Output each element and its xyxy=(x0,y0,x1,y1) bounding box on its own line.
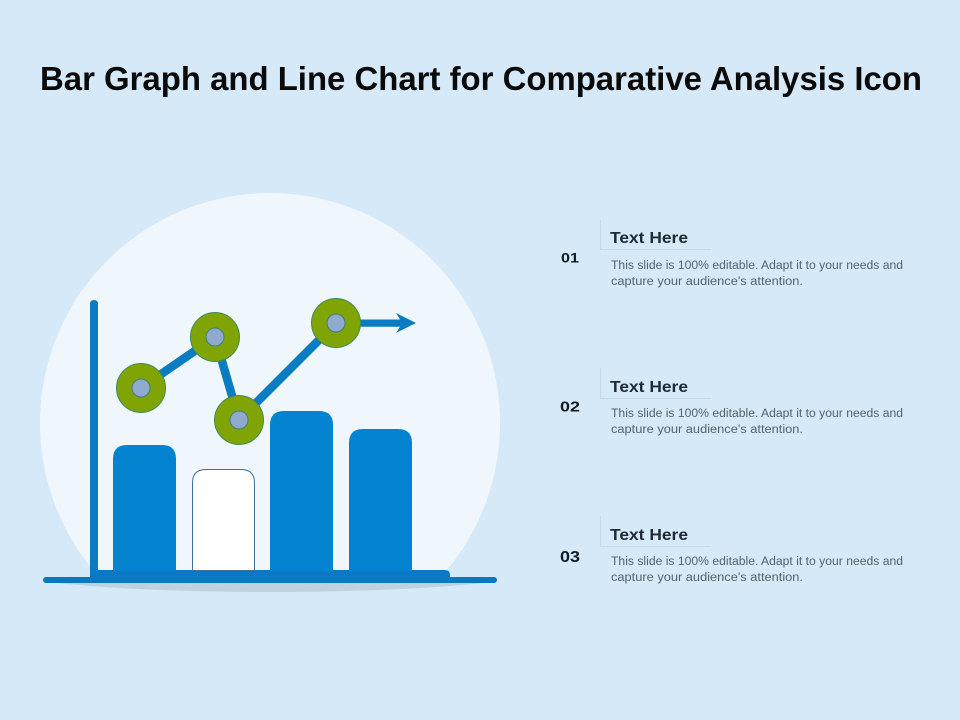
description 01: This slide is 100% editable. Adapt it to your needs and xyxy=(611,260,903,272)
platform shadow xyxy=(47,582,493,592)
background circle xyxy=(40,193,500,578)
title: Bar Graph and Line Chart for Comparative Analysis Icon xyxy=(40,60,922,97)
node 2 xyxy=(190,312,240,362)
node 4 xyxy=(312,298,360,348)
platform xyxy=(43,577,497,583)
base bar xyxy=(90,570,450,583)
item 01 xyxy=(561,220,903,288)
heading 02: Text Here xyxy=(610,379,688,396)
heading 03: Text Here xyxy=(610,527,688,544)
trend line xyxy=(141,323,336,420)
heading 01: Text Here xyxy=(610,230,688,247)
node 1 xyxy=(116,364,166,412)
number 03: 03 xyxy=(560,549,580,566)
arrow xyxy=(336,313,416,333)
description 03: capture your audience's attention. xyxy=(611,572,803,584)
bar 4 xyxy=(349,429,412,571)
illustration: bar graph and line chart icon xyxy=(40,193,500,592)
description 02: This slide is 100% editable. Adapt it to your needs and xyxy=(611,408,903,420)
number 01: 01 xyxy=(561,250,580,266)
number 02: 02 xyxy=(560,400,580,416)
description 03: This slide is 100% editable. Adapt it to your needs and xyxy=(611,556,903,568)
node 3 xyxy=(214,396,264,444)
bar 1 xyxy=(113,445,176,571)
item 03 xyxy=(560,516,903,584)
vertical axis xyxy=(90,300,98,575)
description 01: capture your audience's attention. xyxy=(611,276,803,288)
bar 3 xyxy=(270,411,333,571)
bar 2 xyxy=(192,470,254,570)
item 02 xyxy=(560,368,903,436)
description 02: capture your audience's attention. xyxy=(611,424,803,436)
